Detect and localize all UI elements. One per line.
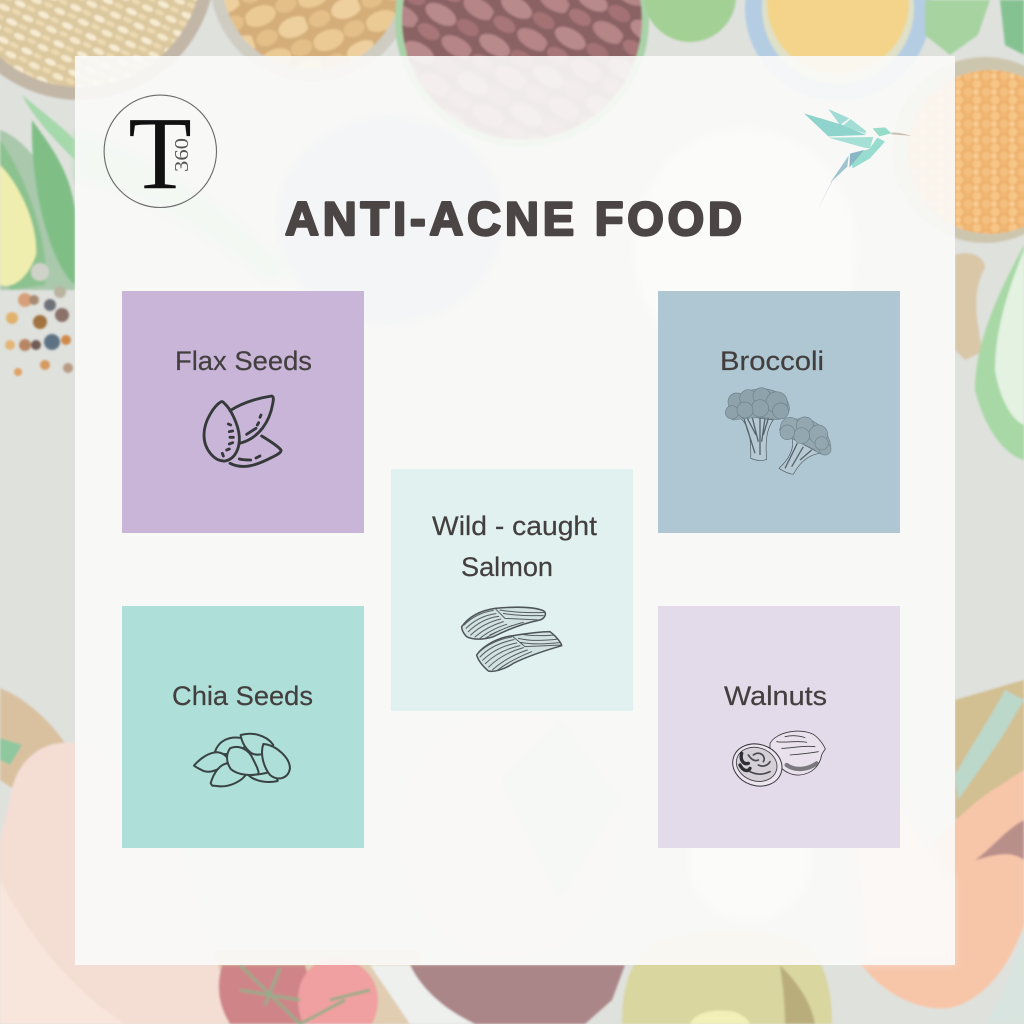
salmon wood board and greens	[955, 680, 1024, 820]
logo: T360	[104, 95, 216, 211]
title: ANTI-ACNE FOOD	[285, 192, 742, 245]
label: broccoli: Broccoli	[720, 346, 824, 376]
top right greens	[925, 0, 1024, 55]
tomatoes	[219, 958, 378, 1024]
icon: walnuts	[727, 731, 825, 792]
wooden board bottom	[180, 950, 420, 1024]
almond bowl	[210, 0, 414, 82]
chicken shading	[0, 880, 125, 1024]
lower right cloth	[985, 935, 1024, 1024]
label: chia seeds: Chia Seeds	[172, 681, 313, 711]
salmon detail	[975, 820, 1024, 860]
label: salmon: Salmon	[461, 552, 553, 582]
label: walnuts: Walnuts	[724, 681, 827, 711]
mixed legumes	[5, 263, 73, 376]
ginger and bok choy	[955, 245, 1024, 460]
icon: broccoli	[725, 388, 831, 474]
logo: T360: T	[128, 96, 192, 211]
chicken breast	[0, 742, 250, 1024]
white cloth	[370, 965, 490, 1024]
translucent white panel	[75, 56, 955, 965]
kidney bean bowl	[395, 0, 649, 147]
grain bowl	[0, 0, 215, 100]
panel: flax seeds	[122, 291, 364, 533]
salmon steak	[862, 770, 1024, 1008]
ghost shapes under panel	[75, 115, 955, 965]
turmeric bowl	[745, 0, 931, 101]
icon: salmon fillets	[462, 607, 562, 671]
icon: flax seeds	[204, 396, 281, 466]
logo: hummingbird	[804, 109, 912, 212]
panel: wild-caught salmon	[391, 469, 633, 711]
panel: walnuts	[658, 606, 900, 848]
lime	[644, 0, 736, 42]
wood board left	[0, 688, 75, 800]
meat ghost	[400, 713, 620, 957]
icon: chia seeds	[194, 734, 290, 786]
logo: T360: 360	[171, 138, 193, 172]
parsley leaf	[0, 738, 22, 765]
olive oil bowl	[622, 930, 832, 1024]
lentil bowl	[892, 57, 1024, 243]
label: flax seeds: Flax Seeds	[175, 346, 312, 376]
meat	[410, 965, 625, 1024]
label: wild-caught salmon: Wild - caught	[432, 511, 598, 541]
left greens	[0, 95, 75, 290]
panel: broccoli	[658, 291, 900, 533]
panel: chia seeds	[122, 606, 364, 848]
